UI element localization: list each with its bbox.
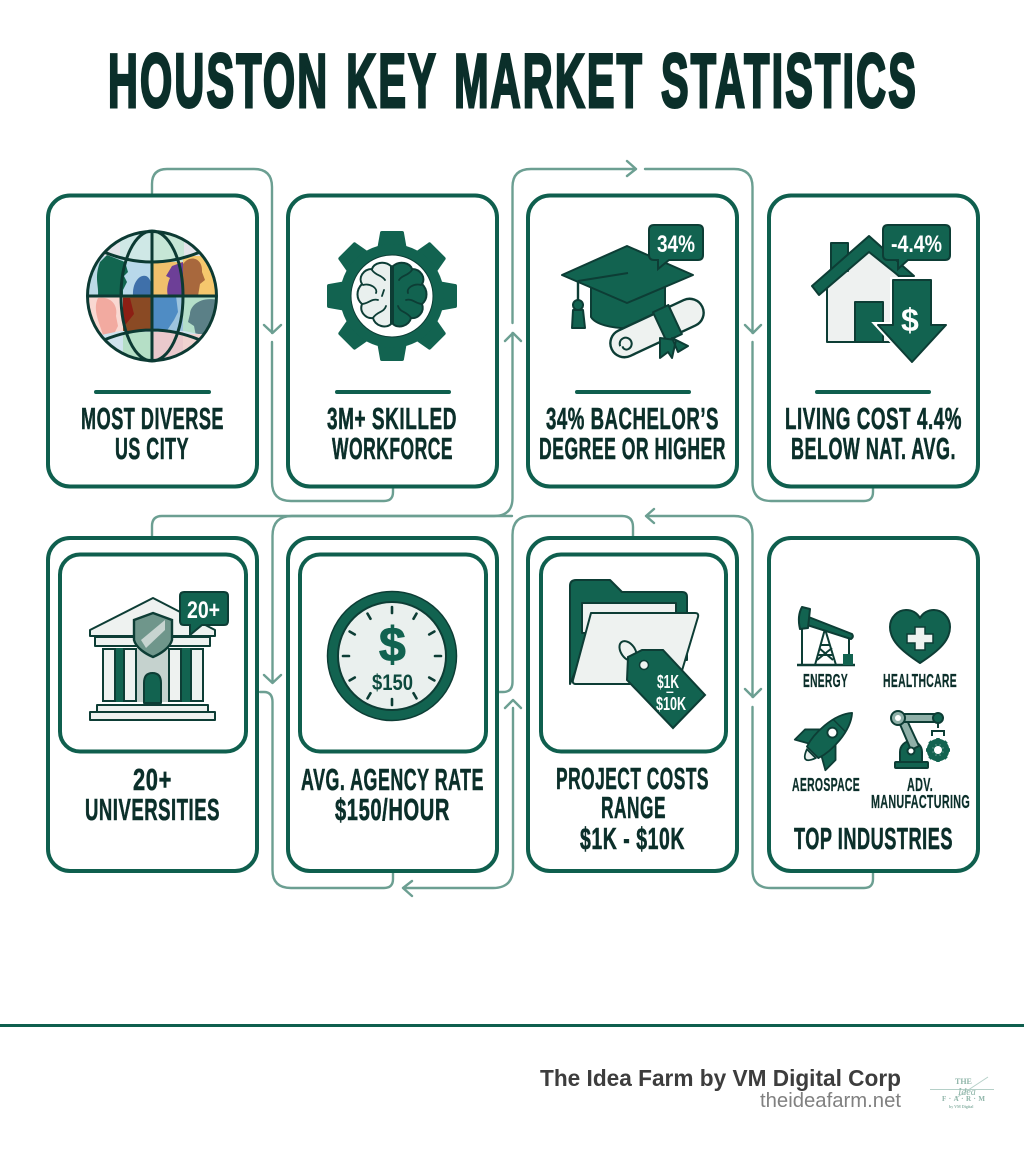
arrow: card 5 up to card 3 column (152, 333, 521, 536)
icon panel (300, 554, 486, 752)
logo (930, 1077, 994, 1109)
footer rule (0, 1024, 1024, 1027)
label line 2: WORKFORCE (332, 431, 453, 466)
icon: oil pumpjack (797, 607, 855, 665)
label: PROJECT COSTS (556, 761, 709, 796)
label line 2: UNIVERSITIES (85, 792, 220, 827)
divider (94, 390, 211, 394)
label: AVG. AGENCY RATE (301, 762, 484, 797)
icon: gear with brain (327, 231, 457, 361)
icon: clock with dollar (328, 592, 456, 720)
divider (815, 390, 931, 394)
logo the: THE (955, 1077, 972, 1086)
icon: heart with cross (890, 610, 950, 663)
divider (575, 390, 691, 394)
arrow: card 6 side up to card 7 top (499, 516, 633, 692)
arrow: below card 4 (752, 342, 873, 501)
footer: company name: The Idea Farm by VM Digital Corp (540, 1065, 901, 1091)
arrow: card 1 to card 2 (152, 169, 281, 333)
badge: -4.4%: -4.4% (891, 231, 942, 258)
label: healthcare: HEALTHCARE (883, 671, 957, 691)
badge: 20+: 20+ (187, 597, 220, 624)
arrow: card 5 side to card 6 bottom (260, 692, 393, 888)
label: 20+ (133, 762, 172, 797)
icon: graduation cap and diploma (562, 225, 709, 364)
tag text 2: $10K (656, 694, 686, 714)
dollar sign: $ (901, 302, 919, 338)
divider (335, 390, 451, 394)
panel: living cost (769, 196, 978, 486)
arrow: below card 8 (752, 707, 873, 888)
label: 3M+ SKILLED (327, 401, 457, 436)
logo farm: F·A·R·M (942, 1095, 985, 1103)
icon: house with price drop arrow (812, 225, 950, 362)
logo byline: by VM Digital (949, 1104, 974, 1109)
tag dash: – (666, 683, 674, 699)
icon: globe of diverse faces (87, 231, 218, 362)
panel: most diverse us city (48, 196, 257, 486)
tag text: $1K (657, 672, 679, 692)
price: $150 (372, 670, 413, 695)
label line 2: DEGREE OR HIGHER (539, 431, 726, 466)
label: aerospace: AEROSPACE (792, 775, 860, 795)
label: 34% BACHELOR’S (546, 401, 719, 436)
footer: website: theideafarm.net (760, 1090, 901, 1112)
arrow: over and down to card 4 (645, 169, 761, 333)
label line 2: US CITY (115, 431, 189, 466)
arrow: leaving column to card 2 bottom (272, 342, 393, 501)
label: MOST DIVERSE (81, 401, 224, 436)
icon: folder with price tag (570, 580, 705, 728)
panel: skilled workforce (288, 196, 497, 486)
label line 2: RANGE (601, 790, 666, 825)
arrow: row 2 down to column 2 (264, 516, 512, 683)
arrow: top right down to card 8 column (646, 509, 761, 697)
label line 3: $1K - $10K (580, 821, 685, 856)
panel: agency rate (288, 538, 497, 871)
icon: rocket (790, 698, 867, 775)
badge: 34% (649, 225, 703, 269)
label line 2: $150/HOUR (335, 792, 450, 827)
icon panel (541, 554, 726, 752)
dollar sign: $ (379, 619, 406, 672)
icon: university building (90, 592, 228, 720)
logo idea: Idea (957, 1087, 976, 1098)
panel: universities (48, 538, 257, 871)
label: adv.: ADV. (907, 775, 933, 795)
label: energy: ENERGY (803, 671, 848, 691)
icon panel (60, 554, 246, 752)
icon: robot arm with gear (891, 711, 950, 768)
panel: top industries (769, 538, 978, 871)
arrow: return left to card 6 (403, 700, 521, 896)
badge: 34%: 34% (657, 231, 695, 258)
connectors (152, 161, 873, 896)
panel: bachelor's degree (528, 196, 737, 486)
arrow: up and over toward card 3 (512, 161, 636, 323)
panel: project costs (528, 538, 737, 871)
